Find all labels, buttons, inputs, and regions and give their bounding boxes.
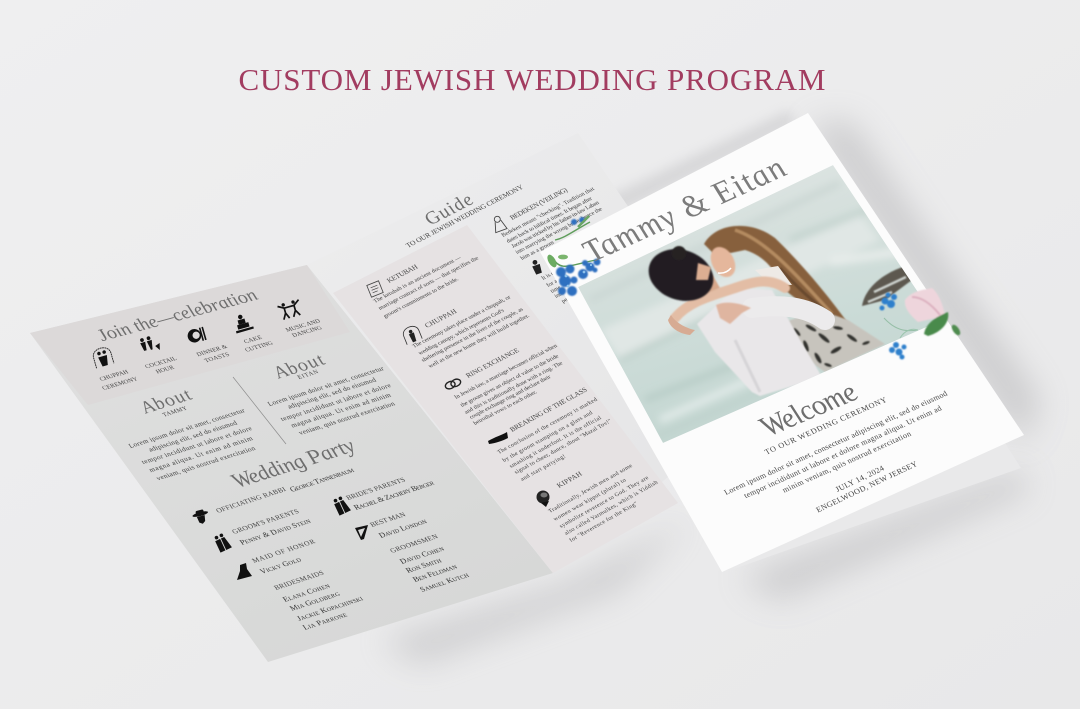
section: hidden ceremony item <box>530 252 598 305</box>
section: breaking of the glass: by the groom stamping on a glass and <box>502 410 594 464</box>
section: bedeken <box>491 186 604 262</box>
section: bedeken: him as a groom <box>520 240 556 262</box>
section: ring exchange: and this is traditionally done with a ring. The <box>464 361 565 416</box>
wedding party list: David London <box>377 517 429 540</box>
wedding party list: Elana Cohen <box>281 581 332 604</box>
section: hidden ceremony item: It is customary for the <box>540 252 591 282</box>
heading: guide: Guide <box>419 191 479 229</box>
section: ring exchange: RING EXCHANGE <box>464 346 521 380</box>
woman top <box>755 266 792 285</box>
icon labels: CHUPPAH <box>98 369 131 383</box>
section: chuppah <box>401 295 531 370</box>
section: chuppah: well as the new home they will build together. <box>428 313 531 370</box>
wedding party list: BEST MAN <box>368 511 408 529</box>
text block: about tammy: TAMMY <box>161 405 189 418</box>
icon: cocktail <box>139 334 161 355</box>
icon: maid of honor dress <box>237 563 252 580</box>
icon labels: HOUR <box>154 364 177 375</box>
rock <box>862 266 912 306</box>
icon: rabbi <box>191 508 211 526</box>
icon: chuppah <box>92 346 114 368</box>
wedding party list: MAID OF HONOR <box>250 538 317 565</box>
section: ring exchange: In Jewish law, a marriage becomes official when <box>453 343 559 401</box>
wedding party list: BRIDE'S PARENTS <box>344 476 407 502</box>
wedding party list: Vicky Gold <box>258 555 304 576</box>
text block: welcome: tempor incididunt ut labore et dolore magna aliqua. Ut enim ad <box>742 404 943 500</box>
text block: about eitan: tempor incididunt ut labore et dolore <box>279 382 393 423</box>
icon labels: DINNER & <box>195 344 229 358</box>
floral: top-left corner <box>545 216 600 296</box>
man hair <box>648 248 714 302</box>
icon: bride's parents <box>332 495 351 516</box>
panel: celebration band <box>30 265 350 405</box>
panel: front cover <box>540 113 1024 572</box>
woman face <box>710 246 736 278</box>
section: kippah: symbolize reverence to God. They are <box>559 475 650 530</box>
wedding party list: Ben Feldman <box>411 562 460 584</box>
icon labels: CAKE <box>242 334 264 345</box>
heading: join the celebration: Join the—celebration <box>91 286 263 345</box>
man shirt <box>697 288 822 396</box>
wedding party list: Penny & David Stein <box>238 516 313 547</box>
wedding party list: David Cohen <box>398 544 447 566</box>
wedding party list: GROOMSMEN <box>388 533 440 555</box>
text block: about eitan: veniam, quis nostrud exercitation <box>297 400 397 437</box>
icon: dancing <box>277 299 303 320</box>
icon: dinner <box>186 327 206 345</box>
text block: about tammy: veniam, quis nostrud exercitation <box>155 445 258 482</box>
section: breaking of the glass: signal to cheer, dance, shout "Mazal Tov!" <box>514 418 614 476</box>
section: bedeken: dates back to biblical times. It began after <box>505 195 594 245</box>
icon: tuxedo <box>355 525 368 540</box>
panel: inside left page <box>30 265 553 662</box>
section: breaking of the glass: and start partying! <box>520 454 567 483</box>
text block: welcome: minim veniam, quis nostrud exercitation <box>781 429 913 494</box>
section: ketubah: KETUBAH <box>385 263 420 285</box>
wedding party list: Ron Smith <box>404 556 444 575</box>
icon labels: TOASTS <box>203 351 232 364</box>
woman arm <box>675 281 785 318</box>
section: breaking of the glass: The conclusion of the ceremony is marked <box>496 396 599 456</box>
section: breaking of the glass: smashing it underfoot. It is the official <box>508 414 603 470</box>
panel: ceremony guide <box>333 225 678 573</box>
section: kippah: women wear kippot (plural) to <box>552 477 628 523</box>
heading: welcome: Welcome <box>750 377 866 442</box>
man hand <box>716 303 751 324</box>
subheading: welcome: TO OUR WEDDING CEREMONY <box>763 395 889 456</box>
section: kippah: for "Reverence for the King" <box>568 500 640 544</box>
heading: wedding party: Wedding Party <box>225 434 362 492</box>
section: breaking of the glass: BREAKING OF THE GLASS <box>508 386 589 434</box>
section: bedeken: BEDEKEN (VEILING) <box>508 186 570 222</box>
text block: about tammy: About <box>134 386 198 418</box>
section: ring exchange <box>444 343 565 427</box>
section: hidden ceremony item: time of the ceremony <box>549 266 598 295</box>
divider <box>233 377 286 444</box>
man neck <box>708 274 720 293</box>
text block: about tammy: magna aliqua. Ut enim ad minim <box>147 435 255 474</box>
wedding party list: Rachel & Zachery Berger <box>352 479 436 512</box>
panel: back cover fold <box>722 440 1021 572</box>
section: hidden ceremony item: into the marriage <box>554 276 593 300</box>
shadows <box>380 110 1040 665</box>
wedding party list: BRIDESMAIDS <box>272 569 326 592</box>
section: ring exchange: the groom gives an object of value to the bride <box>459 353 561 409</box>
icon labels: MUSIC AND <box>284 318 322 334</box>
icon labels: CUTTING <box>244 340 275 354</box>
text block: about eitan: EITAN <box>296 369 321 381</box>
icon labels: CEREMONY <box>101 376 140 392</box>
dress <box>790 314 884 372</box>
woman hair <box>704 226 850 326</box>
section: kippah <box>536 463 660 544</box>
section: chuppah: wedding canopy, which represents God's <box>418 308 506 357</box>
section: ring exchange: couple exchange ring and declare their <box>469 374 552 421</box>
date and location: ENGELWOOD, NEW JERSEY <box>814 459 919 514</box>
wedding party list: Mia Goldberg <box>288 589 342 613</box>
section: ketubah: groom's commitments to the bride. <box>383 276 461 320</box>
text block: about tammy: tempor incididunt ut labore et dolore <box>140 425 254 466</box>
section: ketubah: The ketubah is an ancient document — <box>373 255 463 305</box>
wedding party list: Samuel Kutch <box>418 571 471 594</box>
wedding party list: GROOM'S PARENTS <box>230 508 301 536</box>
title: CUSTOM JEWISH WEDDING PROGRAM <box>238 62 826 97</box>
text block: about eitan: adipiscing elit, sed do eiusmod <box>286 376 378 410</box>
text block: welcome: Lorem ipsum dolor sit amet, consectetur adipiscing elit, sed do eiusmod <box>722 389 949 497</box>
wedding party list: Jackie Kopachinski <box>295 594 365 623</box>
section: bedeken: into marrying the wrong bride, hence the <box>515 206 604 256</box>
text block: about tammy <box>127 386 258 482</box>
floral: right magnolia <box>880 288 962 360</box>
icon: groom's parents <box>213 532 232 553</box>
section: chuppah: CHUPPAH <box>423 308 459 330</box>
section: bedeken: Bedeken means "checking". Tradition that <box>501 186 596 239</box>
subheading: guide: TO OUR JEWISH WEDDING CEREMONY <box>404 183 526 249</box>
section: kippah: Traditionally, Jewish men and some <box>548 463 634 515</box>
section: ketubah: marriage contract of sorts — that specifies the <box>377 255 480 312</box>
wedding party list: OFFICIATING RABBI <box>214 486 288 515</box>
text block: about eitan: About <box>267 351 331 383</box>
section: bedeken: Jacob was tricked by his father-in-law Laban <box>510 199 601 250</box>
text block: about tammy: Lorem ipsum dolor sit amet, consectetur <box>127 407 247 450</box>
photo: couple embracing on a beach <box>578 165 938 443</box>
section: chuppah: sheltering presence in the lives of the couple, as <box>420 306 525 364</box>
section: kippah: KIPPAH <box>555 470 584 490</box>
date and location: JULY 14, 2024 <box>834 464 886 494</box>
text block: about eitan: Lorem ipsum dolor sit amet, consectetur <box>266 365 386 408</box>
section: chuppah: The ceremony takes place under a chuppah, or <box>412 295 512 350</box>
panel: inside right page <box>307 133 760 573</box>
icon labels: DANCING <box>291 325 324 339</box>
wedding party list: Lia Parrone <box>301 610 349 632</box>
man sleeve <box>752 306 825 320</box>
text block: about eitan <box>266 351 397 437</box>
icon: cake <box>232 312 254 333</box>
section: kippah: also called Yarmulkes, which is Yiddish <box>564 480 660 537</box>
wedding party list <box>214 466 471 632</box>
icon labels <box>98 318 324 392</box>
names: Tammy & Eitan <box>574 152 795 268</box>
section: hidden ceremony item: person <box>561 293 578 305</box>
text block: about tammy: adipiscing elit, sed do eiusmod <box>147 419 239 453</box>
section: hidden ceremony item: for a groom to wear <box>545 262 591 289</box>
wedding party list: George Tannenbaum <box>288 466 356 494</box>
section: ring exchange: betrothal vows to each other. <box>473 389 539 427</box>
section: breaking of the glass <box>488 386 614 483</box>
icon labels: COCKTAIL <box>144 355 179 370</box>
text block: about eitan: magna aliqua. Ut enim ad minim <box>289 391 393 429</box>
